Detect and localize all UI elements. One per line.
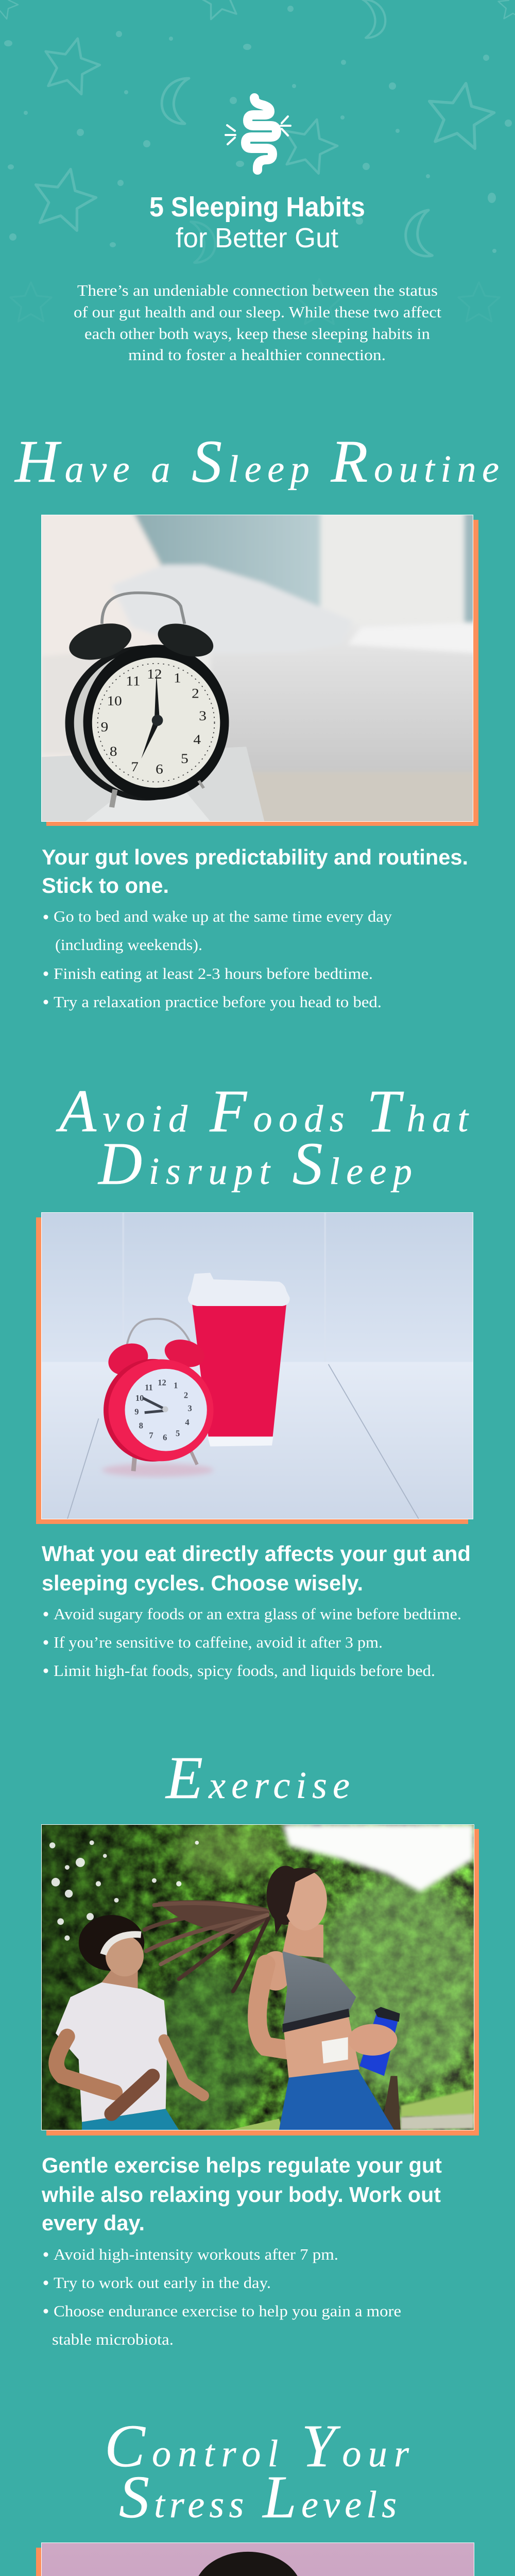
- heading: have a sleep routine: Have a Sleep Routine: [14, 428, 499, 495]
- text block: sleep routine: Finish eating at least 2-3 hours before bedtime.: [54, 964, 373, 982]
- panel: sleep routine photo: 7: [131, 759, 139, 775]
- heading: avoid foods that disrupt sleep: Disrupt Sleep: [97, 1130, 412, 1197]
- text block: exercise: Avoid high-intensity workouts after 7 pm.: [54, 2245, 338, 2263]
- text block: foods: If you’re sensitive to caffeine, avoid it after 3 pm.: [54, 1633, 383, 1651]
- intro text: [74, 281, 441, 364]
- panel: sleep routine photo: 3: [199, 708, 207, 724]
- panel: sleep routine photo: [33, 509, 479, 828]
- heading: avoid foods that disrupt sleep: Avoid Foods That: [56, 1077, 469, 1145]
- text block: sleep routine: Try a relaxation practice before you head to bed.: [54, 993, 382, 1011]
- panel: foods photo: 1: [174, 1381, 178, 1391]
- title: for Better Gut: [176, 223, 338, 253]
- intro text: of our gut health and our sleep. While these two affect: [74, 303, 441, 321]
- text block: exercise: Gentle exercise helps regulate your gut: [42, 2153, 442, 2177]
- heading: control your stress levels: [105, 2412, 409, 2531]
- text block: exercise: Choose endurance exercise to help you gain a more: [54, 2302, 401, 2320]
- panel: foods photo: 12: [158, 1378, 166, 1387]
- intro text: each other both ways, keep these sleeping habits in: [84, 325, 431, 343]
- panel: foods photo: 3: [188, 1403, 192, 1413]
- panel: sleep routine photo: 4: [193, 732, 201, 748]
- text block: sleep routine: Your gut loves predictability and routines.: [42, 845, 468, 869]
- panel: foods photo: 7: [149, 1431, 153, 1440]
- panel: exercise photo: [41, 1820, 486, 2136]
- text block: exercise: stable microbiota.: [52, 2330, 174, 2348]
- panel: sleep routine photo: 10: [107, 693, 122, 708]
- text block: sleep routine: [42, 845, 468, 1011]
- panel: foods photo: 4: [185, 1417, 190, 1427]
- panel: foods photo: 5: [176, 1429, 180, 1438]
- panel: sleep routine photo: 12: [147, 667, 162, 682]
- panel: sleep routine photo: 8: [110, 744, 117, 759]
- panel: foods photo: 8: [139, 1420, 143, 1430]
- title: [149, 192, 365, 253]
- heading: exercise: Exercise: [165, 1744, 350, 1811]
- heading: avoid foods that disrupt sleep: [56, 1077, 469, 1197]
- night sky pattern of stars and moons: [0, 0, 515, 324]
- heading: control your stress levels: Stress Levels: [119, 2463, 397, 2531]
- text block: sleep routine: Go to bed and wake up at the same time every day: [54, 907, 392, 925]
- panel: sleep routine photo: 5: [181, 751, 188, 766]
- heading: control your stress levels: Control Your: [105, 2412, 409, 2480]
- title: 5 Sleeping Habits: [149, 192, 365, 223]
- panel: foods photo: 6: [163, 1432, 167, 1442]
- panel: foods photo: [36, 1212, 473, 1524]
- text block: foods: Avoid sugary foods or an extra glass of wine before bedtime.: [54, 1605, 461, 1623]
- text block: sleep routine: (including weekends).: [55, 936, 202, 954]
- panel: foods photo: 10: [135, 1393, 144, 1403]
- panel: sleep routine photo: 6: [156, 762, 163, 777]
- icon: gut: [226, 98, 290, 170]
- text block: foods: sleeping cycles. Choose wisely.: [42, 1571, 363, 1595]
- panel: foods photo: 9: [134, 1407, 139, 1417]
- text block: sleep routine: Stick to one.: [42, 873, 169, 897]
- panel: sleep routine photo: 9: [101, 720, 108, 735]
- text block: foods: [42, 1541, 471, 1680]
- text block: exercise: every day.: [42, 2211, 145, 2235]
- panel: sleep routine photo: 2: [192, 686, 199, 701]
- text block: exercise: while also relaxing your body. Work out: [41, 2182, 441, 2207]
- panel: foods photo: 2: [184, 1391, 188, 1400]
- panel: stress photo: [36, 2543, 474, 2576]
- text block: exercise: [41, 2153, 442, 2348]
- text block: foods: What you eat directly affects your gut and: [42, 1541, 471, 1566]
- intro text: There’s an undeniable connection between the status: [77, 281, 438, 299]
- text block: exercise: Try to work out early in the day.: [54, 2274, 271, 2292]
- intro text: mind to foster a healthier connection.: [128, 346, 386, 364]
- text block: foods: Limit high-fat foods, spicy foods, and liquids before bed.: [54, 1662, 435, 1680]
- panel: sleep routine photo: 1: [174, 671, 181, 686]
- panel: foods photo: 11: [145, 1382, 153, 1392]
- panel: sleep routine photo: 11: [126, 674, 141, 689]
